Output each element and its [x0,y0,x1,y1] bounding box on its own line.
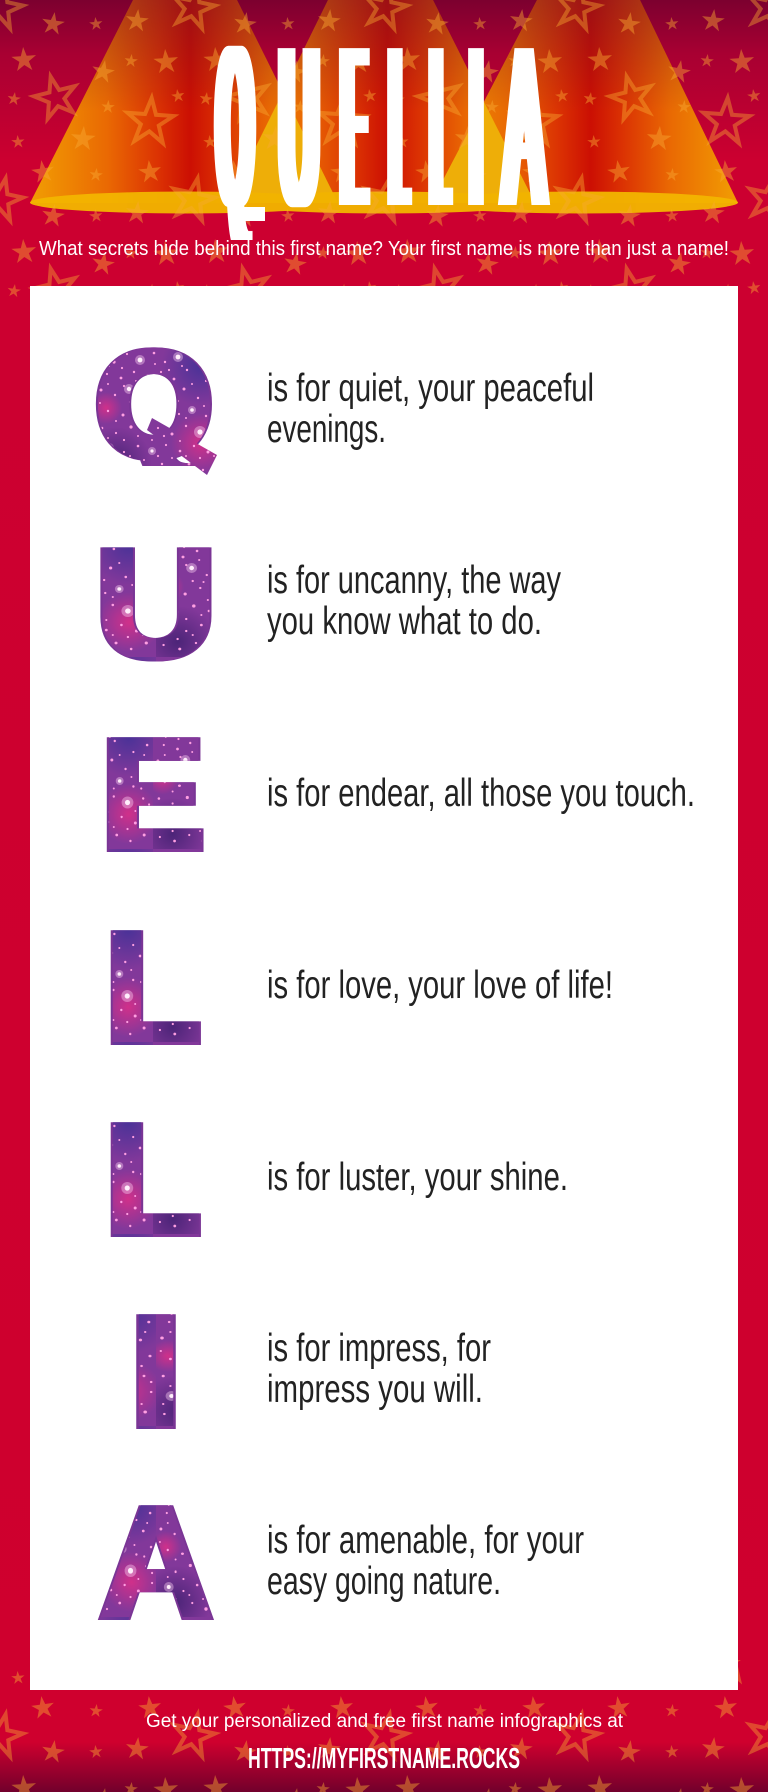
row L second [105,1092,568,1268]
text L: is for love, your love of life! [267,964,613,1007]
title: E [343,0,365,254]
letter U: U [96,518,216,691]
text L second: is for luster, your shine. [267,1156,568,1199]
title: L [432,0,448,254]
title: A [504,0,544,254]
row L [105,900,613,1076]
letter L: L [105,900,201,1076]
row I [130,1283,491,1459]
spotlight: middle cone [228,0,535,203]
letter L second: L [105,1092,201,1268]
subtitle: What secrets hide behind this first name? Your first name is more than just a name! [39,238,729,260]
spotlight: left cone [30,0,338,203]
letter Q: Q [97,323,211,487]
white panel [30,286,738,1690]
row Q [96,347,592,475]
text A: easy going nature. [267,1560,501,1603]
letter E: E [101,707,205,883]
text I: impress you will. [267,1368,483,1411]
footer invitation text: Get your personalized and free first name infographics at [146,1711,624,1732]
letter A: A [100,1475,212,1651]
star pattern: bottom band [0,1660,768,1792]
text Q: evenings. [267,408,386,451]
title: U [280,0,318,255]
text A: is for amenable, for your [267,1519,584,1562]
row U [96,518,561,691]
letter I: I [130,1283,182,1459]
footer url: HTTPS://MYFIRSTNAME.ROCKS [248,1743,520,1775]
title: L [391,0,407,254]
text U: is for uncanny, the way [267,559,561,602]
spotlight: floor pools [30,192,738,214]
text Q: is for quiet, your peaceful [267,367,594,410]
title: Q [218,0,252,254]
text I: is for impress, for [267,1327,491,1370]
row A [100,1475,584,1651]
star pattern: top band [0,0,768,300]
title: I [472,0,480,254]
spotlight: overlap highlights [228,92,535,203]
row E [101,707,695,883]
spotlight: top shading [30,0,738,203]
title [218,0,544,255]
spotlights [30,0,738,214]
spotlight: right cone [431,0,738,203]
text U: you know what to do. [267,600,542,643]
